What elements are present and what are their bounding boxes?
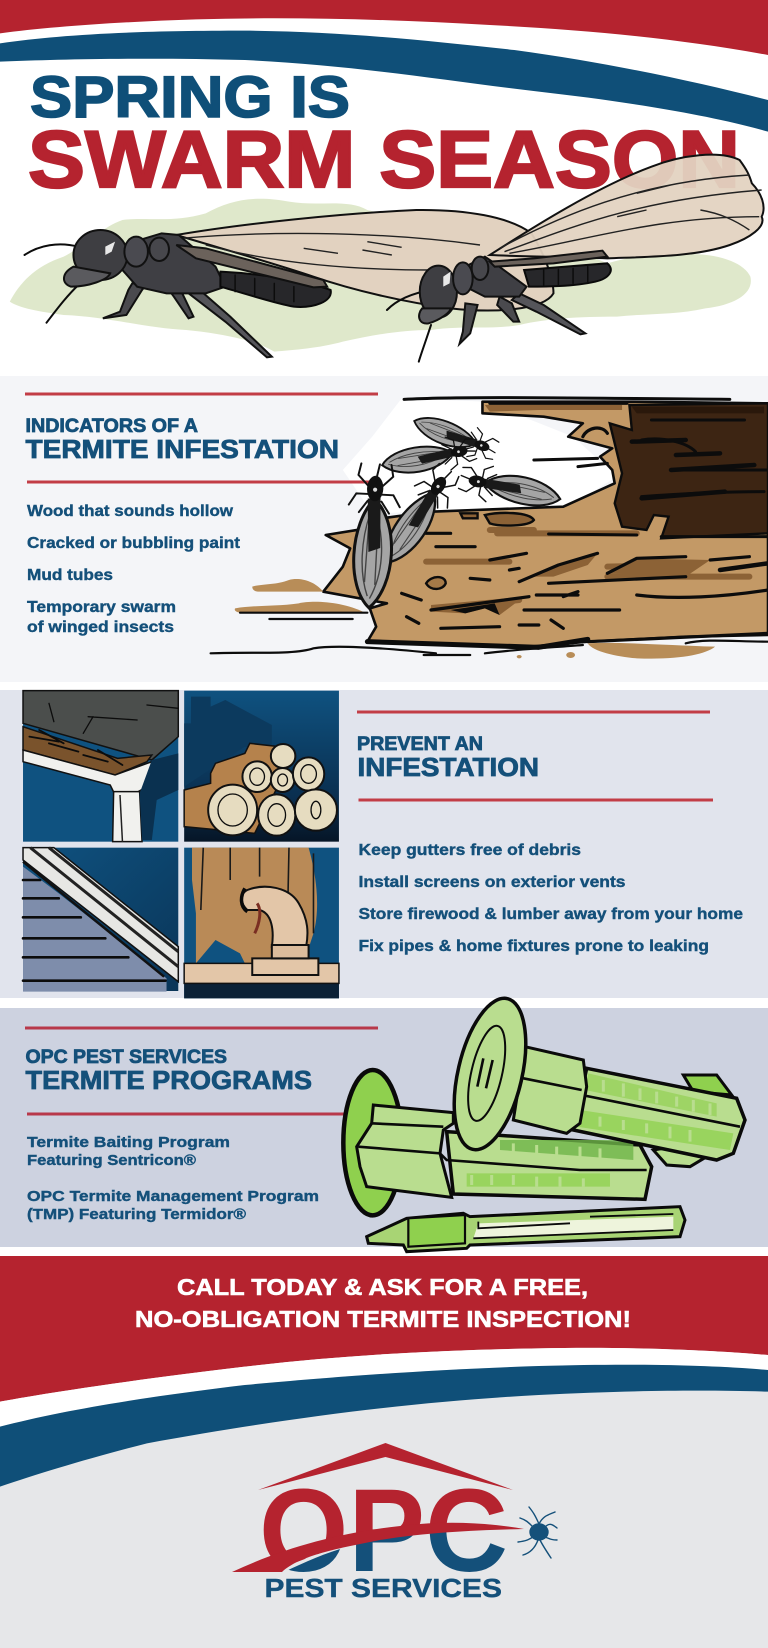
wood gallery marks — [367, 398, 768, 647]
title: swarm season: SWARM SEASON — [28, 115, 740, 205]
indicators list: Mud tubes — [27, 567, 113, 584]
panel background — [0, 1008, 768, 1247]
programs list: (TMP) Featuring Termidor® — [27, 1206, 246, 1223]
bottom wave bands — [0, 1256, 768, 1487]
programs list: OPC Termite Management Program — [27, 1188, 319, 1205]
ground lines — [211, 613, 768, 655]
prevention tips list: Keep gutters free of debris — [358, 842, 581, 859]
icon: five winged termites — [343, 407, 564, 609]
programs heading line 2: TERMITE PROGRAMS — [26, 1067, 312, 1095]
wood damage illustration — [211, 398, 768, 659]
prevention tips list — [358, 842, 743, 955]
photo grid of four tips — [23, 691, 339, 998]
rear bait station — [441, 991, 745, 1167]
illustration: bait stations — [343, 991, 745, 1252]
green bush backdrop — [10, 199, 751, 352]
logo spider icon — [518, 1507, 557, 1558]
indicators list: Temporary swarm — [27, 599, 176, 616]
indicators list: Wood that sounds hollow — [27, 503, 234, 520]
front bait station — [343, 1070, 652, 1215]
prevention tips list: Install screens on exterior vents — [358, 874, 626, 891]
logo letters upper: OPC — [259, 1465, 508, 1597]
red rule top — [25, 392, 378, 396]
prevent heading line 2: INFESTATION — [358, 754, 539, 782]
indicators heading line 1: INDICATORS OF A — [26, 416, 198, 437]
red rule top — [357, 710, 710, 714]
logo swoosh — [232, 1523, 524, 1572]
panel: opc termite programs — [0, 1008, 768, 1247]
illustration: two swarming termites — [10, 155, 764, 362]
right wing — [490, 155, 764, 258]
right termite — [387, 251, 611, 362]
programs list: Featuring Sentricon® — [27, 1152, 196, 1169]
tile: stacked firewood — [184, 691, 339, 842]
left wing — [176, 210, 553, 310]
indicators heading line 2: TERMITE INFESTATION — [26, 436, 339, 464]
red rule bottom — [27, 1112, 347, 1116]
mud tubes — [235, 579, 715, 659]
dark decayed wood — [610, 403, 768, 538]
panel: prevent an infestation — [0, 690, 768, 998]
panel background — [0, 376, 768, 682]
opc pest services logo — [232, 1443, 557, 1603]
indicators list — [27, 503, 240, 636]
title: spring is: SPRING IS — [30, 65, 350, 130]
red rule bottom — [27, 480, 372, 484]
indicators list: of winged insects — [27, 619, 174, 636]
tile: gutter with debris — [23, 691, 178, 842]
prevention tips list: Store firewood & lumber away from your home — [358, 906, 743, 923]
logo roof — [258, 1443, 513, 1490]
header section — [0, 0, 768, 362]
logo letters lower: OPC — [259, 1465, 508, 1597]
prevention tips list: Fix pipes & home fixtures prone to leaking — [358, 938, 709, 955]
red rule top — [25, 1026, 378, 1030]
panel background — [0, 690, 768, 998]
logo pest services text: PEST SERVICES — [264, 1573, 502, 1603]
red rule bottom — [358, 798, 713, 802]
top wave bands — [0, 0, 768, 132]
cta text line 1: CALL TODAY & ASK FOR A FREE, — [177, 1274, 588, 1300]
exposed white paint area — [343, 398, 617, 513]
indicators list: Cracked or bubbling paint — [27, 535, 240, 552]
programs list — [27, 1134, 319, 1223]
panel: indicators of a termite infestation — [0, 376, 768, 682]
left termite — [24, 230, 331, 357]
tile: roof vent siding — [23, 848, 178, 992]
cta text line 2: NO-OBLIGATION TERMITE INSPECTION! — [135, 1306, 631, 1332]
bait rod — [367, 1207, 685, 1252]
tile: leaking pipe on wood wall — [184, 848, 339, 998]
footer gray background — [0, 1340, 768, 1648]
wood body — [323, 402, 768, 647]
panel: call to action and footer — [0, 1256, 768, 1648]
programs heading line 1: OPC PEST SERVICES — [26, 1047, 227, 1068]
programs list: Termite Baiting Program — [27, 1134, 230, 1151]
prevent heading line 1: PREVENT AN — [357, 734, 483, 755]
